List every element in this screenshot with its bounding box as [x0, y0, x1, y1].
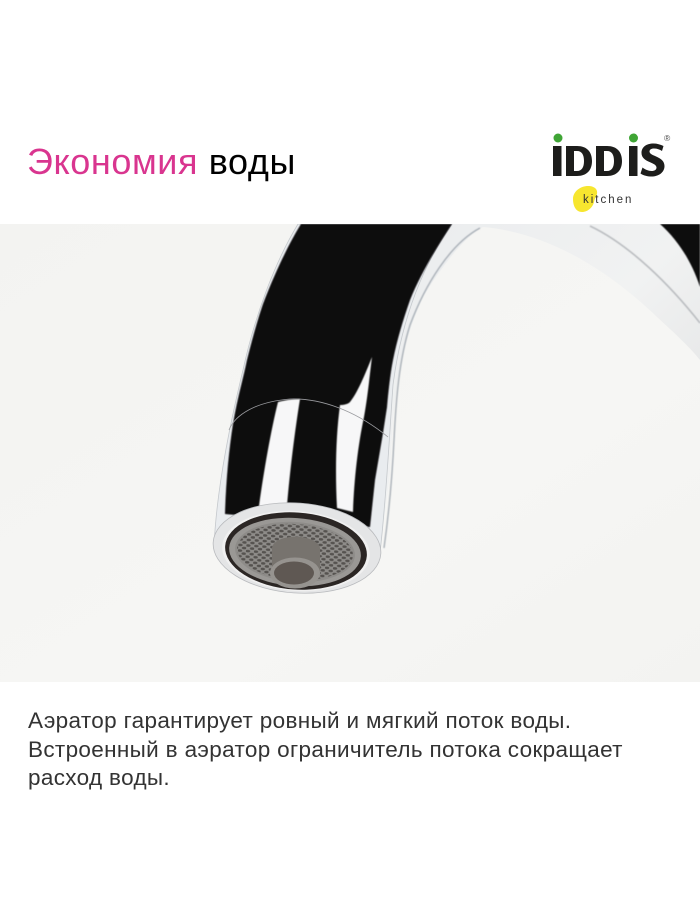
- title: Экономия воды: [27, 141, 296, 182]
- photo background: [0, 224, 700, 682]
- collar seam: [229, 399, 388, 437]
- logo yellow blob: [573, 186, 597, 212]
- highlight band left: [259, 399, 300, 506]
- logo wordmark: ®: [664, 133, 671, 143]
- photo: chrome faucet with aerator: [0, 224, 700, 682]
- body text: Аэратор гарантирует ровный и мягкий поток воды.: [28, 708, 571, 733]
- logo kitchen label: kitchen: [583, 194, 633, 206]
- body text: [28, 708, 623, 790]
- faucet arch: [340, 224, 700, 553]
- logo: IDDIS kitchen: [553, 133, 671, 212]
- body text: Встроенный в аэратор ограничитель потока сокращает: [28, 736, 623, 762]
- aerator: [210, 497, 384, 599]
- highlight band right with reflection: [336, 357, 372, 512]
- dark reflection: [225, 224, 452, 527]
- faucet spout body: [214, 224, 452, 553]
- body text: расход воды.: [28, 765, 170, 790]
